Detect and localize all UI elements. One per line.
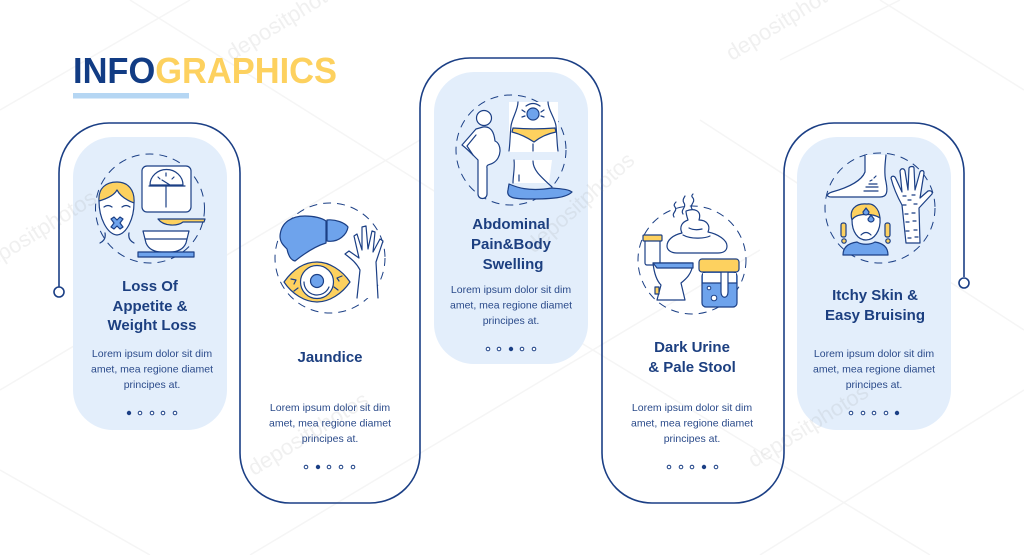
icon: liver, eye and hand — [275, 203, 385, 313]
body text: Lorem ipsum dolor sit dim — [92, 348, 212, 360]
text: depositphotos — [743, 379, 873, 473]
body text: principes at. — [664, 433, 720, 445]
body text: amet, mea regione diamet — [450, 300, 572, 312]
timeline outline connecting the five steps — [54, 58, 969, 503]
icon: face, scale, spoon and bowl — [96, 154, 205, 263]
body text: amet, mea regione diamet — [91, 364, 213, 376]
body text: Lorem ipsum dolor sit dim — [270, 402, 390, 414]
panel: dark urine and pale stool — [631, 194, 753, 469]
icon: swollen belly figure, abdomen and leg — [456, 95, 572, 205]
body text: Lorem ipsum dolor sit dim — [814, 348, 934, 360]
text: depositphotos — [243, 387, 373, 481]
panel backgrounds: light blue cards — [73, 72, 951, 430]
heading: Appetite & — [112, 298, 188, 315]
heading: Jaundice — [297, 349, 363, 366]
heading: & Pale Stool — [648, 359, 736, 376]
icon: foot, arm and worried boy — [825, 153, 935, 263]
body text: amet, mea regione diamet — [269, 418, 391, 430]
body text: principes at. — [846, 379, 902, 391]
panel: loss of appetite and weight loss — [91, 154, 213, 415]
progress dots — [849, 411, 899, 415]
body text: principes at. — [302, 433, 358, 445]
body text: Lorem ipsum dolor sit dim — [451, 284, 571, 296]
panel: itchy skin and easy bruising — [813, 153, 935, 415]
heading: Pain&Body — [471, 236, 552, 253]
text: depositphotos — [521, 147, 639, 258]
body text: principes at. — [483, 315, 539, 327]
progress dots — [667, 465, 718, 469]
icon: stool, toilet and sample jar — [638, 194, 746, 314]
heading: Swelling — [483, 256, 543, 273]
progress dots — [304, 465, 355, 469]
heading: Weight Loss — [108, 317, 196, 334]
heading: Loss Of — [122, 278, 179, 295]
heading: Dark Urine — [654, 339, 730, 356]
panel: jaundice — [269, 203, 391, 469]
heading: Easy Bruising — [825, 307, 925, 324]
body text: amet, mea regione diamet — [631, 418, 753, 430]
body text: principes at. — [124, 379, 180, 391]
body text: amet, mea regione diamet — [813, 364, 935, 376]
progress dots — [127, 411, 177, 415]
progress dots — [486, 347, 536, 351]
body text: Lorem ipsum dolor sit dim — [632, 402, 752, 414]
heading: Itchy Skin & — [832, 287, 918, 304]
title: INFOGRAPHICS — [73, 50, 337, 91]
panel: abdominal pain and body swelling — [450, 95, 572, 351]
heading: Abdominal — [472, 216, 550, 233]
